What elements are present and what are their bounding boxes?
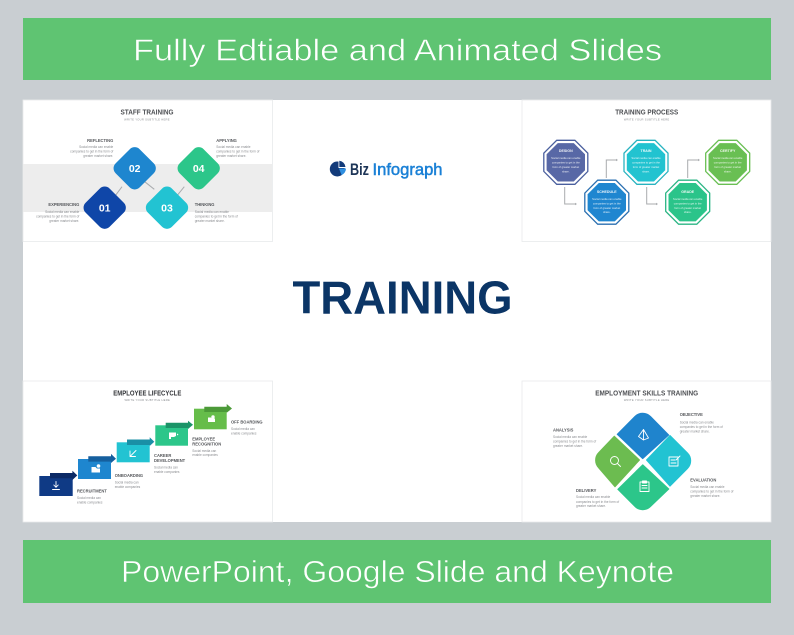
text: objective: Social media can enable — [680, 420, 714, 424]
step 1: recruitment: enable companies — [77, 500, 103, 504]
petal: delivery — [618, 465, 669, 510]
text: reflecting — [70, 138, 114, 158]
step 2: onboarding: enable companies — [115, 485, 141, 489]
text: applying: companies to get in the form of — [216, 149, 260, 153]
panel: employment skills training: EMPLOYMENT SKILLS TRAINING — [595, 390, 699, 398]
text: evaluation: Social media can enable — [690, 485, 725, 489]
text: thinking: greater market share. — [195, 219, 225, 223]
text: experiencing: Social media can enable — [45, 210, 80, 214]
panel: employee lifecycle — [23, 381, 272, 522]
step 3: career development: DEVELOPMENT — [154, 458, 186, 463]
text: evaluation: greater market share. — [690, 494, 720, 498]
top banner: Fully Edtiable and Animated Slides — [133, 32, 662, 68]
diamond 04 — [175, 144, 223, 192]
text: delivery — [576, 488, 619, 508]
main heading: TRAINING — [292, 272, 512, 324]
octagon: schedule: SCHEDULE — [597, 190, 617, 194]
step 1: recruitment — [39, 471, 107, 504]
central white panel — [23, 100, 771, 522]
octagon: schedule: share. — [603, 210, 611, 214]
text: applying: Social media can enable — [216, 145, 251, 149]
text: objective: greater market share. — [680, 430, 710, 434]
text: experiencing: EXPERIENCING — [48, 202, 79, 207]
step 3: career development: enable companies — [154, 470, 180, 474]
step 3: career development: CAREER — [154, 453, 171, 458]
panel: training process — [522, 100, 771, 242]
petal: analysis — [596, 436, 640, 487]
octagon: train: Social media can enable — [631, 156, 661, 160]
step 2: onboarding: ONBOARDING — [115, 473, 143, 478]
panel: employee lifecycle: WRITE YOUR SUBTITLE HERE — [124, 398, 170, 402]
panel: staff training: WRITE YOUR SUBTITLE HERE — [124, 118, 170, 122]
octagon: grade — [666, 180, 710, 224]
logo: Biz Infograph: Infograph — [372, 161, 442, 179]
text: evaluation: EVALUATION — [690, 478, 716, 482]
octagon: schedule — [585, 180, 629, 224]
text: thinking: THINKING — [195, 202, 214, 207]
text: applying: greater market share. — [216, 154, 246, 158]
step 3: career development — [117, 437, 186, 474]
text: applying — [216, 138, 260, 158]
octagon: certify: share. — [724, 170, 732, 174]
octagon: certify: Social media can enable — [713, 156, 743, 160]
text: analysis: ANALYSIS — [553, 428, 574, 432]
text: thinking: companies to get in the form of — [195, 214, 238, 218]
text: objective: OBJECTIVE — [680, 412, 703, 417]
step 4: employee recognition: Social media can — [192, 449, 216, 453]
octagon: schedule: form of greater market — [594, 206, 620, 210]
text: thinking: Social media can enable — [195, 210, 229, 214]
step 1: recruitment: RECRUITMENT — [77, 488, 107, 494]
octagon: design — [544, 140, 588, 184]
step 2: onboarding: Social media can — [115, 480, 139, 484]
logo: Biz Infograph — [330, 160, 442, 179]
octagon: train: form of greater market — [633, 165, 660, 169]
text: reflecting: greater market share. — [83, 154, 113, 158]
panel: employment skills training: WRITE YOUR SUBTITLE HERE — [624, 398, 670, 402]
text: reflecting: Social media can enable — [79, 145, 114, 149]
petal: objective — [617, 413, 669, 459]
step 1: recruitment: Social media can — [77, 496, 101, 500]
text: experiencing — [36, 202, 80, 223]
panel: employee lifecycle: EMPLOYEE LIFECYCLE — [113, 390, 182, 398]
top banner — [23, 18, 771, 80]
octagon: grade: form of greater market — [674, 206, 701, 210]
octagon: train: share. — [642, 170, 650, 174]
octagon: grade: Social media can enable — [673, 197, 703, 201]
octagon: design: form of greater market — [553, 165, 579, 169]
octagon: grade: companies to get in the — [674, 201, 702, 205]
text: objective: companies to get in the form of — [680, 425, 723, 429]
step 4: employee recognition: enable companies — [192, 453, 218, 457]
panel: employment skills training — [522, 381, 771, 522]
diamond 02: 02 — [129, 163, 141, 175]
octagon: design: DESIGN — [559, 149, 573, 153]
petal: evaluation — [646, 436, 691, 486]
step 4: employee recognition: RECOGNITION — [192, 442, 221, 446]
panel: training process: WRITE YOUR SUBTITLE HERE — [624, 118, 670, 122]
step 4: employee recognition: EMPLOYEE — [192, 436, 215, 442]
text: delivery: greater market share. — [576, 504, 606, 508]
text: thinking — [195, 202, 238, 223]
octagon: certify: CERTIFY — [720, 149, 736, 153]
octagon: train: companies to get in the — [632, 160, 660, 164]
step 5: off boarding: enable companies — [231, 432, 257, 436]
octagon: train — [624, 140, 668, 184]
octagon: certify — [706, 140, 750, 184]
diamond 03 — [143, 184, 191, 232]
step 5: off boarding — [194, 404, 263, 436]
octagon: train: TRAIN — [641, 149, 652, 153]
text: evaluation — [690, 478, 734, 498]
text: applying: APPLYING — [216, 138, 237, 143]
octagon: design: Social media can enable — [551, 156, 581, 160]
diamond 04: 04 — [193, 163, 205, 175]
text: experiencing: companies to get in the form of — [36, 214, 79, 218]
diamond 01: 01 — [99, 202, 111, 214]
octagon: certify: form of greater market — [714, 165, 741, 169]
octagon: design: companies to get in the — [552, 160, 580, 164]
octagon: grade: share. — [684, 210, 692, 214]
text: delivery: DELIVERY — [576, 488, 597, 493]
step 3: career development: Social media can — [154, 466, 178, 470]
panel: staff training: STAFF TRAINING — [120, 110, 174, 116]
octagon: certify: companies to get in the — [714, 160, 742, 164]
bottom banner: PowerPoint, Google Slide and Keynote — [121, 554, 674, 589]
diamond 02 — [111, 144, 159, 192]
octagon: schedule: Social media can enable — [592, 197, 622, 201]
panel: training process: TRAINING PROCESS — [615, 110, 678, 117]
text: delivery: Social media can enable — [576, 495, 610, 499]
text: experiencing: greater market share. — [49, 219, 79, 223]
text: analysis: companies to get in the form of — [553, 440, 596, 444]
text: objective — [680, 412, 723, 434]
step 4: employee recognition — [155, 421, 221, 457]
text: delivery: companies to get in the form of — [576, 500, 619, 504]
panel: staff training — [23, 100, 272, 242]
octagon: grade: GRADE — [681, 190, 695, 194]
step 2: onboarding — [78, 454, 143, 489]
text: analysis — [553, 428, 596, 448]
octagon: schedule: companies to get in the — [593, 201, 621, 205]
text: evaluation: companies to get in the form of — [690, 490, 734, 494]
logo: Biz Infograph: Biz — [350, 161, 369, 179]
bottom banner — [23, 540, 771, 603]
diamond 03: 03 — [161, 202, 173, 214]
step 5: off boarding: OFF BOARDING — [231, 420, 263, 425]
diamond 01 — [81, 184, 129, 232]
text: reflecting: companies to get in the form of — [70, 149, 113, 153]
text: analysis: greater market share. — [553, 444, 583, 448]
octagon: design: share. — [562, 170, 570, 174]
step 5: off boarding: Social media can — [231, 427, 255, 431]
text: reflecting: REFLECTING — [87, 138, 113, 143]
text: analysis: Social media can enable — [553, 435, 587, 439]
